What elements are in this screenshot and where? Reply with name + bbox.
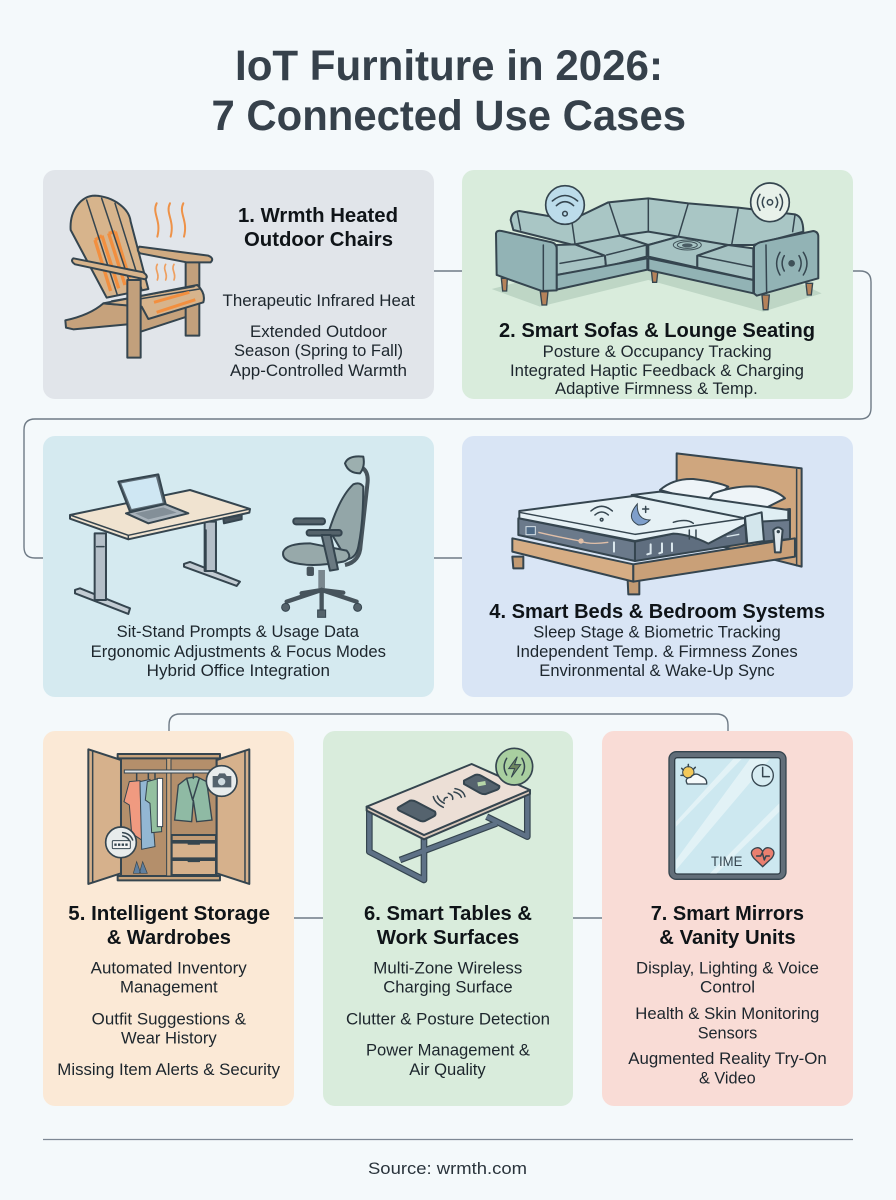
feature list: Clutter & Posture Detection [346,1010,550,1028]
heading: Work Surfaces [377,926,519,949]
feature list: Missing Item Alerts & Security [57,1061,281,1079]
feature list: Control [700,979,755,997]
icon: heated adirondack chair [65,196,212,358]
feature list [91,623,386,680]
heading: 4. Smart Beds & Bedroom Systems [489,600,825,623]
icon: smart wardrobe [88,749,249,884]
feature list: Air Quality [409,1061,486,1079]
icon: smart mirror [669,752,786,879]
feature list: Sleep Stage & Biometric Tracking [533,624,781,642]
panel: 2 smart sofas [462,170,853,399]
feature list: Automated Inventory [91,960,247,978]
feature list [516,624,798,680]
heading: 2. Smart Sofas & Lounge Seating [499,319,815,342]
connector arrows between panels [24,271,871,918]
source footer: Source: wrmth.com [368,1159,527,1178]
panel: 4 smart beds [462,436,853,697]
feature list: Ergonomic Adjustments & Focus Modes [91,643,386,661]
feature list: & Video [699,1069,756,1087]
feature list [628,960,827,1087]
feature list [57,960,281,1079]
feature list: Season (Spring to Fall) [234,342,403,360]
feature list: Charging Surface [383,979,513,997]
feature list: Outfit Suggestions & [92,1010,246,1028]
heading [238,204,398,251]
feature list: Wear History [121,1030,217,1048]
feature list: Sit-Stand Prompts & Usage Data [117,623,360,641]
title: 7 Connected Use Cases [212,92,686,140]
title [212,42,686,140]
icon: sensor sectional sofa [492,183,822,312]
heading: 7. Smart Mirrors [651,902,804,925]
panel: 1 heated outdoor chairs [43,170,434,399]
feature list: Environmental & Wake-Up Sync [539,662,775,680]
panel: 7 smart mirrors [602,731,853,1106]
heading: & Vanity Units [659,926,796,949]
heading: 5. Intelligent Storage [68,902,270,925]
feature list: Power Management & [366,1042,530,1060]
feature list: Health & Skin Monitoring [635,1005,819,1023]
heading [68,902,270,949]
icon: wireless charging table [367,748,533,880]
panel: 3 sit-stand desks and chairs [43,436,434,697]
heading [364,902,532,949]
feature list: Posture & Occupancy Tracking [543,343,772,361]
panel: 5 intelligent storage [43,731,294,1106]
heading [651,902,804,949]
heading: 6. Smart Tables & [364,902,532,925]
feature list: Therapeutic Infrared Heat [222,292,415,310]
feature list: Extended Outdoor [250,323,388,341]
feature list: Management [120,979,218,997]
heading: Outdoor Chairs [244,228,393,251]
icon: standing desk with laptop [70,474,250,614]
heading: 1. Wrmth Heated [238,204,398,227]
feature list: Hybrid Office Integration [147,662,330,680]
feature list: Adaptive Firmness & Temp. [555,380,758,398]
mirror display label: TIME [711,853,742,869]
feature list: App-Controlled Warmth [230,362,407,380]
feature list [346,960,550,1079]
icon: ergonomic office chair [282,456,368,617]
feature list: Sensors [698,1024,757,1042]
title: IoT Furniture in 2026: [235,42,663,90]
feature list [510,343,804,398]
feature list [222,292,415,380]
heading: & Wardrobes [107,926,231,949]
panel: 6 smart tables [323,731,573,1106]
feature list: Independent Temp. & Firmness Zones [516,643,798,661]
feature list: Integrated Haptic Feedback & Charging [510,362,804,380]
feature list: Multi-Zone Wireless [373,960,522,978]
icon: smart bed [512,453,802,594]
feature list: Display, Lighting & Voice [636,960,819,978]
feature list: Augmented Reality Try-On [628,1050,827,1068]
